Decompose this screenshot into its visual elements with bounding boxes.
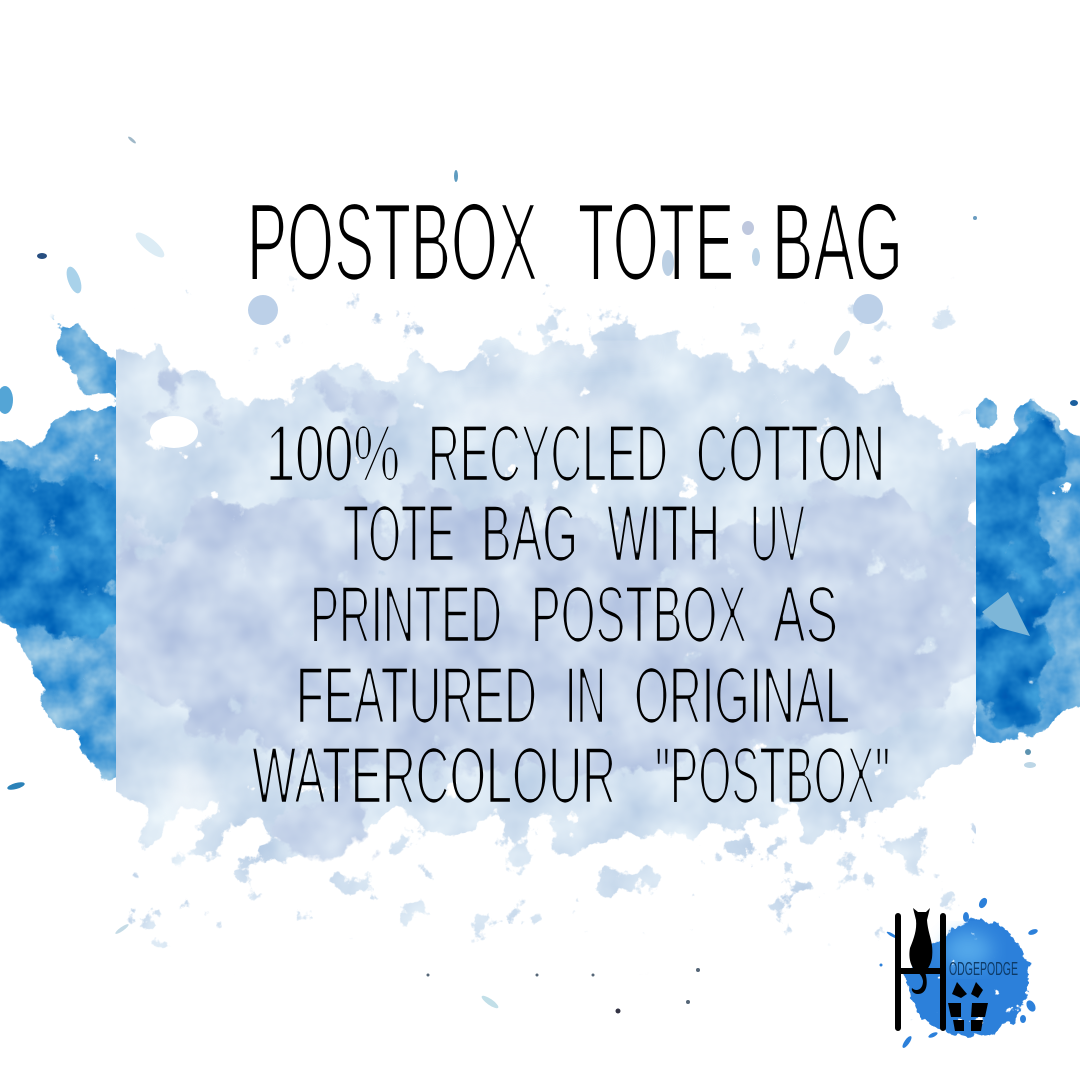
- body text: ORIGINAL: [634, 651, 850, 741]
- body text: FEATURED: [296, 651, 537, 741]
- right blue watercolour panel: [976, 398, 1080, 744]
- pale central watercolour splash: [100, 295, 990, 950]
- body text: PRINTED: [310, 570, 502, 660]
- body text: WATERCOLOUR: [252, 731, 616, 821]
- body text: IN: [565, 651, 606, 741]
- logo: gift box icon: [948, 982, 988, 1031]
- left blue watercolour panel: [0, 314, 116, 782]
- body text: AS: [773, 570, 838, 660]
- logo: cat silhouette: [909, 908, 932, 994]
- logo: letter H: [898, 916, 943, 1028]
- body text: TOTE: [343, 489, 455, 579]
- body text: COTTON: [696, 409, 885, 499]
- title: BAG: [772, 181, 903, 304]
- title: TOTE: [578, 181, 734, 304]
- body text: BAG: [481, 489, 578, 579]
- body text: POSTBOX: [531, 570, 747, 660]
- body text: [252, 409, 890, 821]
- logo: blue paint splash: [880, 896, 1039, 1049]
- title: POSTBOX: [247, 181, 538, 304]
- logo: Hodgepodge: [880, 896, 1039, 1049]
- body text: UV: [750, 489, 805, 579]
- logo: wordmark: ODGEPODGE: [949, 959, 1018, 979]
- body text: WITH: [607, 489, 720, 579]
- body text: 100%: [266, 409, 400, 499]
- body text: RECYCLED: [428, 409, 668, 499]
